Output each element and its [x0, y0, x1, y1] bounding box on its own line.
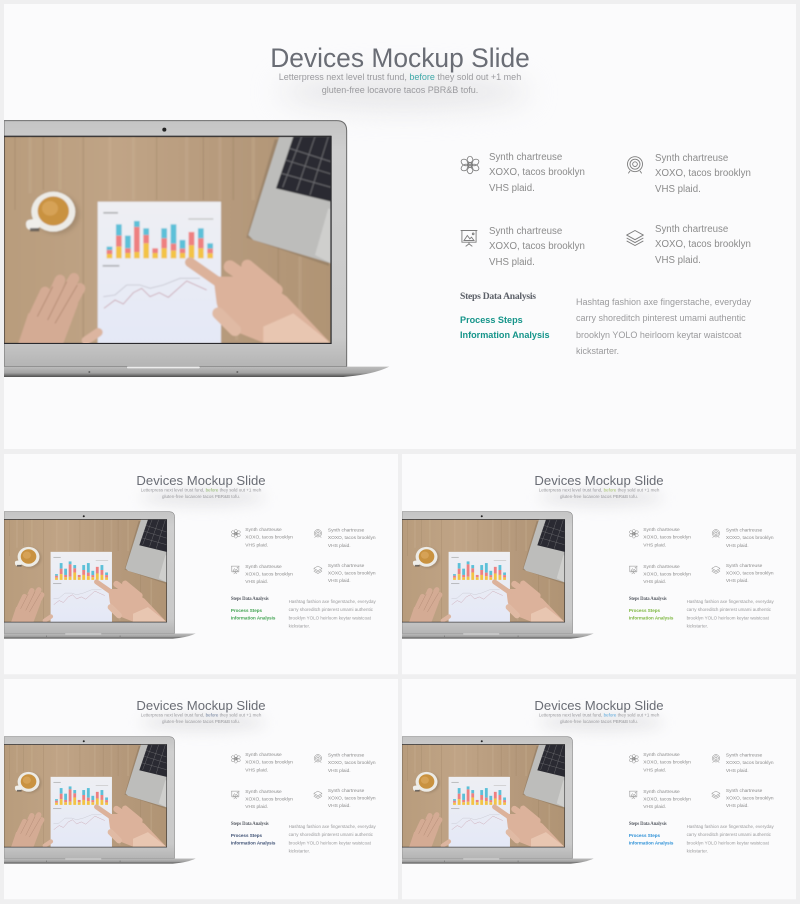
- feature text 2: XOXO, tacos brooklyn: [726, 760, 774, 766]
- feature text 2: [328, 528, 376, 548]
- feature text 3: VHS plaid.: [643, 579, 666, 585]
- panel: blue variant: [402, 679, 796, 899]
- subtitle: [141, 713, 262, 724]
- accent heading: [231, 832, 275, 847]
- icon: target: [627, 156, 643, 174]
- feature text 1: Synth chartreuse: [245, 527, 282, 533]
- title: Devices Mockup Slide: [136, 473, 266, 488]
- paragraph: kickstarter.: [687, 848, 708, 853]
- paragraph: Hashtag fashion axe fingerstache, everyday: [289, 599, 376, 604]
- heading: steps data analysis: Steps Data Analysis: [231, 821, 269, 827]
- feature text 2: [328, 752, 376, 775]
- feature text 4: XOXO, tacos brooklyn: [328, 571, 376, 576]
- paragraph: [576, 297, 751, 356]
- feature text 1: XOXO, tacos brooklyn: [489, 167, 585, 178]
- paragraph: carry shoreditch pinterest umami authentic: [687, 832, 771, 837]
- icon: presentation board: [460, 230, 478, 247]
- icon: target: [712, 529, 720, 538]
- feature text 4: XOXO, tacos brooklyn: [726, 571, 774, 576]
- paragraph: kickstarter.: [289, 848, 310, 853]
- paragraph: Hashtag fashion axe fingerstache, everyday: [687, 824, 774, 829]
- title: Devices Mockup Slide: [136, 698, 266, 713]
- feature text 2: [726, 752, 774, 775]
- paragraph: carry shoreditch pinterest umami authentic: [687, 607, 771, 612]
- feature text 4: VHS plaid.: [328, 803, 351, 809]
- feature text 1: XOXO, tacos brooklyn: [245, 535, 293, 540]
- feature text 3: VHS plaid.: [489, 257, 535, 268]
- icon: presentation board: [628, 790, 638, 800]
- subtitle: [539, 488, 660, 499]
- laptop mockup: [4, 736, 196, 864]
- feature text 4: VHS plaid.: [655, 255, 701, 266]
- feature text 2: Synth chartreuse: [328, 528, 364, 533]
- feature text 3: Synth chartreuse: [245, 789, 282, 794]
- icon: target: [314, 529, 322, 538]
- subtitle: Letterpress next level trust fund, before they sold out +1 meh: [539, 713, 659, 718]
- icon: layers: [712, 566, 720, 574]
- paragraph: [686, 599, 774, 628]
- accent heading: [231, 608, 276, 620]
- feature text 4: Synth chartreuse: [726, 563, 762, 568]
- feature text 1: VHS plaid.: [245, 543, 268, 548]
- accent heading: [629, 608, 674, 620]
- feature text 4: [726, 563, 774, 584]
- feature text 4: Synth chartreuse: [655, 224, 728, 235]
- feature text 1: [489, 152, 585, 194]
- feature text 3: [489, 226, 585, 268]
- feature text 2: VHS plaid.: [328, 768, 351, 773]
- feature text 3: Synth chartreuse: [489, 226, 562, 237]
- paragraph: [687, 823, 774, 855]
- paragraph: Hashtag fashion axe fingerstache, everyday: [687, 599, 774, 604]
- laptop mockup: [402, 679, 601, 877]
- icon: flower: [629, 529, 638, 538]
- feature text 4: [655, 224, 751, 266]
- feature text 3: VHS plaid.: [245, 579, 268, 585]
- paragraph: brooklyn YOLO heirloom keytar waistcoat: [289, 840, 371, 845]
- feature text 4: VHS plaid.: [726, 578, 749, 584]
- accent heading: Process Steps: [231, 833, 262, 838]
- feature text 1: [245, 527, 293, 548]
- icon: presentation board: [231, 566, 240, 574]
- subtitle: Letterpress next level trust fund, before they sold out +1 meh: [141, 488, 261, 493]
- title: Devices Mockup Slide: [534, 473, 664, 488]
- heading: steps data analysis: Steps Data Analysis: [231, 596, 269, 602]
- icon: layers: [313, 790, 323, 800]
- feature text 2: [655, 153, 751, 195]
- heading: steps data analysis: Steps Data Analysis: [629, 596, 667, 602]
- feature text 3: XOXO, tacos brooklyn: [643, 797, 691, 802]
- subtitle: gluten-free locavore tacos PBR&B tofu.: [162, 719, 240, 724]
- feature text 1: VHS plaid.: [643, 543, 666, 548]
- feature text 1: [643, 527, 691, 548]
- subtitle: [141, 488, 262, 499]
- feature text 2: VHS plaid.: [726, 543, 749, 548]
- paragraph: [289, 823, 376, 855]
- feature text 3: VHS plaid.: [643, 804, 666, 810]
- feature text 1: VHS plaid.: [643, 768, 666, 773]
- feature text 1: [245, 752, 293, 773]
- accent heading: Information Analysis: [629, 840, 673, 845]
- feature text 3: XOXO, tacos brooklyn: [643, 572, 691, 577]
- heading: steps data analysis: Steps Data Analysis: [460, 291, 536, 302]
- accent heading: Information Analysis: [231, 840, 275, 845]
- accent heading: Process Steps: [629, 833, 660, 838]
- subtitle: [402, 712, 796, 725]
- paragraph: [288, 599, 376, 628]
- paragraph: brooklyn YOLO heirloom keytar waistcoat: [289, 615, 371, 620]
- accent heading: Information Analysis: [460, 330, 550, 340]
- paragraph: brooklyn YOLO heirloom keytar waistcoat: [576, 330, 741, 340]
- paragraph: kickstarter.: [576, 346, 619, 356]
- feature text 2: Synth chartreuse: [328, 753, 364, 758]
- paragraph: carry shoreditch pinterest umami authentic: [289, 607, 373, 612]
- feature text 1: Synth chartreuse: [643, 527, 680, 533]
- icon: flower: [231, 529, 240, 538]
- feature text 2: XOXO, tacos brooklyn: [726, 535, 774, 541]
- subtitle: Letterpress next level trust fund, before they sold out +1 meh: [539, 488, 659, 493]
- heading: steps data analysis: Steps Data Analysis: [629, 821, 667, 827]
- feature text 3: Synth chartreuse: [643, 789, 680, 794]
- feature text 3: [643, 564, 691, 585]
- subtitle: [279, 72, 521, 95]
- feature text 2: VHS plaid.: [328, 543, 351, 548]
- feature text 4: Synth chartreuse: [726, 788, 762, 793]
- feature text 4: XOXO, tacos brooklyn: [328, 796, 376, 801]
- accent heading: Information Analysis: [629, 615, 673, 620]
- feature text 3: [245, 788, 293, 811]
- panel: main slide: [4, 4, 796, 449]
- panel: lime variant: [402, 454, 796, 674]
- feature text 4: [328, 563, 376, 584]
- feature text 1: [643, 751, 691, 774]
- paragraph: brooklyn YOLO heirloom keytar waistcoat: [687, 615, 769, 620]
- feature text 2: VHS plaid.: [655, 184, 701, 195]
- feature text 3: [245, 564, 293, 585]
- icon: flower: [460, 156, 480, 174]
- icon: flower: [231, 754, 240, 764]
- icon: layers: [626, 230, 644, 246]
- feature text 4: XOXO, tacos brooklyn: [655, 239, 751, 250]
- feature text 3: XOXO, tacos brooklyn: [489, 241, 585, 252]
- paragraph: Hashtag fashion axe fingerstache, everyday: [289, 824, 376, 829]
- feature text 4: XOXO, tacos brooklyn: [726, 796, 774, 801]
- feature text 2: XOXO, tacos brooklyn: [328, 760, 376, 766]
- paragraph: carry shoreditch pinterest umami authentic: [576, 313, 746, 323]
- paragraph: kickstarter.: [687, 623, 708, 628]
- laptop mockup: [4, 512, 196, 639]
- feature text 4: VHS plaid.: [726, 803, 749, 809]
- feature text 4: Synth chartreuse: [328, 788, 364, 793]
- feature text 1: Synth chartreuse: [489, 152, 562, 163]
- feature text 4: [328, 787, 376, 810]
- icon: presentation board: [230, 790, 240, 800]
- subtitle: gluten-free locavore tacos PBR&B tofu.: [322, 84, 478, 94]
- subtitle: Letterpress next level trust fund, before they sold out +1 meh: [141, 713, 261, 718]
- feature text 2: Synth chartreuse: [726, 753, 762, 758]
- feature text 1: Synth chartreuse: [245, 752, 282, 758]
- feature text 1: XOXO, tacos brooklyn: [643, 760, 691, 765]
- feature text 2: XOXO, tacos brooklyn: [655, 168, 751, 179]
- feature text 1: XOXO, tacos brooklyn: [643, 535, 691, 540]
- icon: flower: [629, 754, 639, 764]
- panel: green variant: [4, 454, 398, 674]
- feature text 4: [726, 787, 774, 810]
- feature text 3: [643, 788, 691, 811]
- subtitle: gluten-free locavore tacos PBR&B tofu.: [560, 719, 638, 724]
- subtitle: gluten-free locavore tacos PBR&B tofu.: [560, 494, 638, 499]
- accent heading: [629, 832, 673, 847]
- paragraph: brooklyn YOLO heirloom keytar waistcoat: [687, 840, 769, 845]
- feature text 2: Synth chartreuse: [655, 153, 728, 164]
- feature text 1: VHS plaid.: [489, 183, 535, 194]
- feature text 3: Synth chartreuse: [245, 564, 282, 569]
- accent heading: Process Steps: [231, 608, 262, 613]
- feature text 4: VHS plaid.: [328, 578, 351, 584]
- paragraph: carry shoreditch pinterest umami authentic: [289, 832, 373, 837]
- feature text 4: Synth chartreuse: [328, 563, 364, 568]
- feature text 2: [726, 528, 774, 548]
- feature text 3: VHS plaid.: [245, 804, 268, 810]
- feature text 3: XOXO, tacos brooklyn: [245, 572, 293, 577]
- feature text 1: Synth chartreuse: [643, 752, 680, 758]
- accent heading: Process Steps: [460, 315, 523, 325]
- laptop mockup: [4, 120, 389, 377]
- icon: target: [313, 754, 323, 764]
- accent heading: Process Steps: [629, 608, 660, 613]
- paragraph: Hashtag fashion axe fingerstache, everyday: [576, 297, 751, 307]
- feature text 1: VHS plaid.: [245, 768, 268, 773]
- subtitle: Letterpress next level trust fund, before they sold out +1 meh: [279, 72, 521, 82]
- accent heading: [460, 315, 550, 340]
- title: Devices Mockup Slide: [270, 43, 530, 73]
- icon: layers: [711, 790, 721, 800]
- icon: target: [711, 754, 721, 764]
- feature text 1: XOXO, tacos brooklyn: [245, 760, 293, 765]
- feature text 2: XOXO, tacos brooklyn: [328, 535, 376, 541]
- subtitle: gluten-free locavore tacos PBR&B tofu.: [162, 494, 240, 499]
- feature text 2: Synth chartreuse: [726, 528, 762, 533]
- icon: presentation board: [629, 566, 638, 574]
- feature text 3: Synth chartreuse: [643, 564, 680, 569]
- laptop mockup: [402, 512, 594, 639]
- icon: layers: [314, 566, 322, 574]
- panel: navy variant: [4, 679, 398, 899]
- feature text 2: VHS plaid.: [726, 768, 749, 773]
- feature text 3: XOXO, tacos brooklyn: [245, 797, 293, 802]
- title: Devices Mockup Slide: [534, 698, 664, 713]
- accent heading: Information Analysis: [231, 615, 275, 620]
- paragraph: kickstarter.: [289, 623, 310, 628]
